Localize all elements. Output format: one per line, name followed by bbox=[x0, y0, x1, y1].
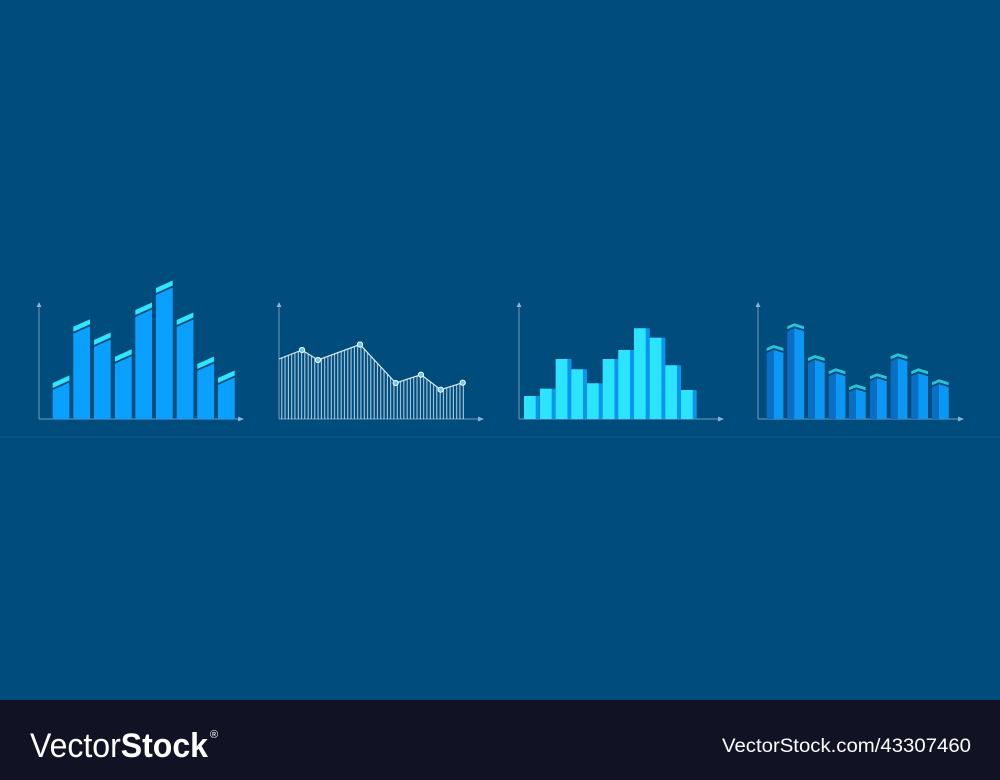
charts canvas bbox=[0, 280, 1000, 438]
chart 3: histogram bars bbox=[516, 302, 724, 422]
chart 2: hatched area line chart bbox=[276, 302, 484, 422]
logo text: VectorStock.com/43307460 bbox=[722, 736, 971, 757]
footer bar bbox=[0, 700, 1000, 780]
chart 1: bar chart with slanted caps bbox=[36, 280, 244, 422]
logo text: ® bbox=[210, 729, 218, 741]
logo text: VectorStock bbox=[30, 727, 208, 765]
chart 4: 3D bars with chevron caps bbox=[756, 302, 964, 422]
logo text bbox=[30, 727, 971, 765]
